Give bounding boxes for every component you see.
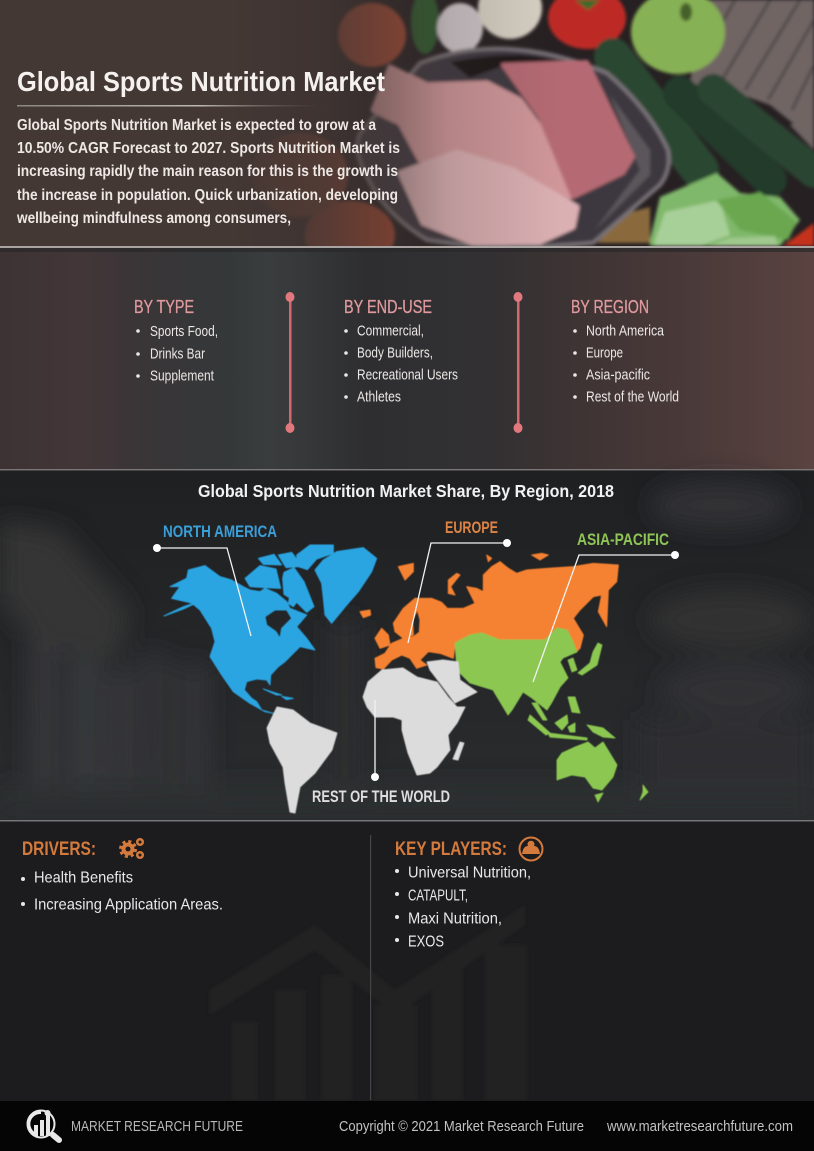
panel: drivers: Health Benefits [34,870,133,886]
callout: North America: NORTH AMERICA [163,523,277,541]
text block: intro paragraph: Global Sports Nutrition Market is expected to grow at a [17,117,376,134]
panel: key players: CATAPULT, [408,888,468,904]
panel: segments background [0,246,814,470]
panel: by type: Drinks Bar [150,346,205,362]
panel: by type: Sports Food, [150,324,218,340]
callout: Rest of the World: REST OF THE WORLD [312,788,450,806]
panel: drivers [21,838,223,914]
text block: intro paragraph: the increase in population. Quick urbanization, developing [17,187,398,204]
panel: by end-use: Body Builders, [357,346,433,362]
panel: footer: Copyright © 2021 Market Research Future [339,1118,584,1135]
panel: drivers: Increasing Application Areas. [34,896,223,914]
panel: by end-use: Recreational Users [357,368,458,384]
callout: Asia-Pacific [533,531,679,682]
panel: by type: BY TYPE [134,296,194,317]
panel: by region [571,296,679,406]
text block: intro paragraph [16,117,400,227]
icon: target with person [520,838,542,860]
callout: North America [153,523,277,636]
callout: Rest of the World [312,700,450,806]
panel: by end-use: Commercial, [357,324,424,340]
panel: key players: Universal Nutrition, [408,864,531,882]
panel: key players: EXOS [408,934,444,950]
panel: by region: Rest of the World [586,390,679,406]
heading: map title: Global Sports Nutrition Market Share, By Region, 2018 [198,481,614,501]
panel: by region: Asia-pacific [586,368,650,384]
panel: by region: North America [586,324,665,340]
panel: key players [395,838,542,950]
heading: title: Global Sports Nutrition Market [17,66,385,97]
world map [164,545,648,813]
panel: drivers: DRIVERS: [22,838,96,860]
panel: footer: www.marketresearchfuture.com [606,1118,793,1135]
panel: by end-use: Athletes [357,390,401,406]
map region: Rest of the World [267,660,477,813]
panel: key players: KEY PLAYERS: [395,838,507,860]
panel: by end-use: BY END-USE [344,296,432,317]
callout: Europe [408,519,511,643]
panel: by type [134,296,218,384]
text block: intro paragraph: increasing rapidly the main reason for this is the growth is [17,163,398,180]
panel: food photo header [0,0,814,269]
text block: intro paragraph: wellbeing mindfulness among consumers, [16,210,291,227]
map region: North America [164,545,377,713]
map region: Europe and Russia [360,553,618,669]
panel: footer [0,1101,814,1151]
divider: pink connector left [286,292,294,433]
map region: Asia-Pacific [455,628,648,802]
panel: by end-use [344,296,458,406]
panel: by type: Supplement [150,368,214,384]
panel: key players: Maxi Nutrition, [408,910,502,928]
callout: Europe: EUROPE [445,519,498,537]
icon: logo magnifier [27,1110,59,1140]
panel: footer: MARKET RESEARCH FUTURE [71,1118,243,1135]
icon: gears [120,839,143,858]
panel: drivers and key players background [0,822,814,1101]
callout: Asia-Pacific: ASIA-PACIFIC [577,531,669,549]
text block: intro paragraph: 10.50% CAGR Forecast to 2027. Sports Nutrition Market is [17,140,400,157]
panel: map section background [0,471,814,822]
panel: by region: BY REGION [571,296,649,317]
panel: by region: Europe [586,346,623,362]
divider: pink connector right [514,292,522,433]
